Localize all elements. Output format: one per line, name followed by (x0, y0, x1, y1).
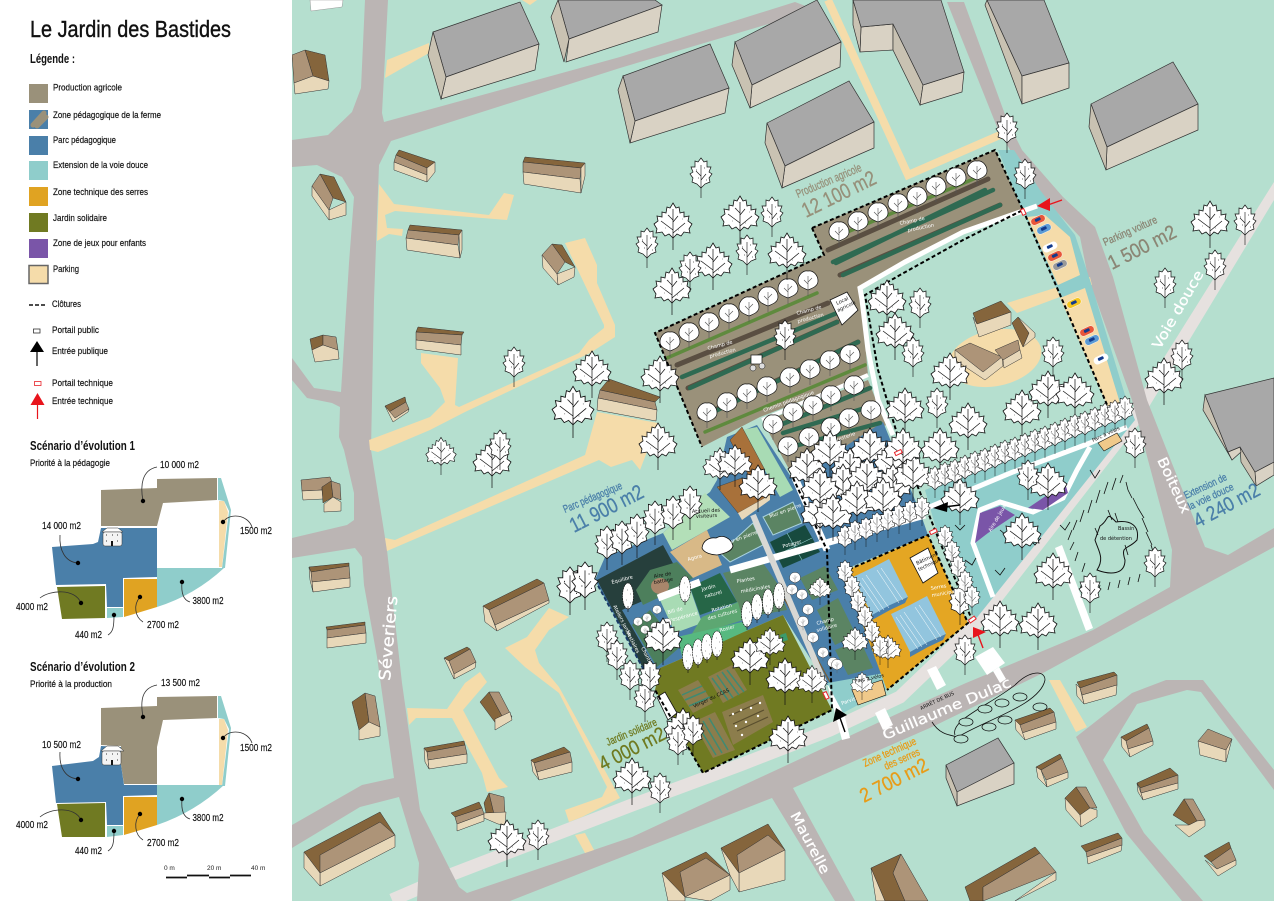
building: grey L block (853, 0, 964, 105)
garden: rotation des cultures (690, 602, 743, 637)
greenhouse 1 (853, 559, 908, 620)
greenhouses (853, 559, 946, 657)
house (1198, 729, 1232, 762)
building: grey block 1 (428, 2, 539, 99)
zone: technique des serres (843, 535, 968, 690)
roads (292, 0, 1274, 901)
legend: zone technique: Zone technique des serres (53, 187, 148, 198)
area: zone technique des serres: Zone technique (861, 736, 918, 770)
legend: parc pédagogique (29, 135, 116, 155)
arrow: red south (973, 627, 986, 648)
street: Séveriers: Séveriers (375, 595, 401, 681)
garden: bill de l'espérance (660, 588, 702, 633)
house: large south 2 (871, 854, 928, 901)
house (424, 741, 467, 769)
legend: portail public: Portail public (52, 325, 99, 336)
garden: mur en pierre 1 (720, 523, 763, 562)
street: Guillaume Dulac: Guillaume Dulac (880, 675, 1014, 744)
building: grey block 8 (1089, 62, 1198, 170)
arrow: red north (1037, 198, 1062, 211)
sheds (657, 292, 938, 720)
chart: scénario 1 map: 10 000 m2 (160, 460, 199, 471)
legend: extension voie douce: Extension de la voie douce (53, 160, 148, 171)
trees: strip hedge (837, 396, 1134, 665)
arrow: black south entrance (833, 708, 847, 732)
road: south-east loop (1076, 680, 1274, 901)
building: grey block 9 (1203, 378, 1274, 486)
house (394, 150, 435, 182)
title: Le Jardin des Bastides (30, 16, 231, 42)
panel: legend sidebar (0, 0, 292, 901)
house (480, 692, 512, 730)
garden annotations: Accueil des (692, 508, 721, 515)
area: jardin solidaire: Jardin solidaire (604, 717, 659, 749)
legend: portail technique: Portail technique (52, 378, 113, 389)
garden annotations: Aire de jeux (988, 504, 1008, 533)
garden annotations: Rosier (719, 624, 736, 634)
chart: scénario 1 map: 440 m2 (75, 630, 102, 641)
area: zone technique des serres: 2 700 m2 (856, 754, 932, 807)
farmhouse (717, 427, 770, 520)
house (1081, 833, 1122, 864)
garden annotations: production (907, 223, 935, 234)
building: grey block 3 (618, 44, 729, 143)
building: grey block 4 (732, 0, 841, 108)
garden annotations: Aire de (653, 571, 672, 580)
chart: scénario 2 map: 440 m2 (75, 846, 102, 857)
garden annotations: Bâtiment (915, 551, 939, 567)
garden: aire de battage (636, 562, 693, 605)
area: extension voie douce: 4 240 m2 (1190, 479, 1264, 532)
legend: entrée publique (30, 341, 108, 366)
legend: entrée publique: Entrée publique (52, 346, 108, 357)
garden annotations: Parvis (841, 696, 857, 707)
garden annotations: Ateliers jardin (611, 604, 632, 638)
chart: scénario 2 map (16, 678, 272, 857)
garden annotations: Mur en pierre (725, 530, 758, 547)
garden annotations: Aire bleu et solidaire (851, 514, 901, 539)
garden annotations: Parc à vélos (1091, 425, 1121, 444)
legend: jardin solidaire (29, 213, 107, 232)
legend: portail public (34, 325, 99, 336)
arrows (833, 198, 1062, 732)
zone: orchard strip (763, 380, 886, 480)
garden: potager médical (770, 525, 820, 568)
garden annotations: médicinales (740, 583, 771, 595)
arrow: black east entrance (933, 502, 960, 512)
house (312, 174, 346, 220)
area: jardin solidaire: 4 000 m2 (595, 723, 669, 775)
house (352, 693, 380, 740)
trees: leafy A (426, 196, 1229, 867)
trees: round orchard rows (660, 161, 987, 462)
garden annotations: Bill de (667, 606, 683, 616)
subheading: scénario 1: Priorité à la pédagogie (30, 458, 110, 469)
legend: zone de jeux (29, 238, 146, 258)
area: extension voie douce: Extension de (1182, 471, 1229, 502)
chart: scénario 2 map: 2700 m2 (147, 838, 179, 849)
house (1065, 787, 1097, 827)
parking and access paths (369, 0, 1092, 853)
parking bus-stop area (932, 673, 1047, 743)
garden annotations: Agroforesterie (821, 431, 856, 449)
legend: zone de jeux: Zone de jeux pour enfants (53, 238, 146, 249)
area: parking voiture: 1 500 m2 (1104, 221, 1180, 274)
crop rows (667, 175, 1000, 450)
chart: scénario 1 map: 2700 m2 (147, 620, 179, 631)
legend: jardin solidaire: Jardin solidaire (53, 213, 107, 224)
scale bar (164, 865, 265, 878)
house (416, 327, 464, 355)
legend: zone pédagogique de la ferme: Zone pédagogique de la ferme (53, 110, 161, 121)
street: Boiteux: Boiteux (1153, 455, 1193, 516)
zone: jardin plots (678, 633, 788, 758)
garden annotations: Verger du CCAS (692, 688, 731, 710)
panel: map background (292, 0, 1274, 901)
garden annotations: Chantier (639, 646, 655, 669)
area: production agricole: 12 100 m2 (798, 167, 880, 222)
house: large south 3 (965, 847, 1056, 901)
garden: plantes médicinales (723, 563, 787, 618)
area: production agricole: Production agricole (794, 160, 864, 201)
zone: jardin solidaire (655, 615, 832, 773)
garden: mini orchard (632, 610, 680, 667)
chart: scénario 1 map: 4000 m2 (16, 602, 48, 613)
chart: scénario 1 map: 3800 m2 (192, 596, 224, 607)
house (1204, 842, 1236, 876)
garden annotations (610, 216, 1134, 712)
bassin de détention (1068, 475, 1155, 595)
garden annotations: Parc à vélos (854, 672, 885, 685)
garden annotations: l'espérance (669, 610, 698, 624)
house (523, 157, 585, 193)
garden annotations: des cultures (707, 608, 738, 622)
house (451, 793, 506, 831)
house (406, 225, 462, 258)
garden annotations: visiteurs (696, 513, 718, 520)
legend: parc pédagogique: Parc pédagogique (53, 135, 116, 146)
heading: scénario 1: Scénario d’évolution 1 (30, 439, 135, 453)
legend: extension voie douce (29, 160, 148, 180)
chart: scénario 1 map (16, 460, 272, 641)
garden annotations: production (709, 347, 736, 360)
garden annotations: ARRÊT DE BUS (918, 689, 955, 712)
street: Maurelle: Maurelle (786, 809, 833, 877)
garden annotations: Champ de (796, 305, 822, 317)
garden annotations: Vestiaires (624, 630, 641, 655)
trees: dense grove (703, 428, 959, 541)
building: grey block 2 (551, 0, 662, 62)
chart: scénario 1 map: 14 000 m2 (42, 521, 81, 532)
area: parc pédagogique: 11 900 m2 (566, 481, 648, 537)
garden: équilibre (597, 545, 675, 672)
road: Séveriers (292, 0, 1274, 901)
garden annotations: Champ (816, 617, 835, 627)
trees: serrated B (489, 113, 1256, 860)
house (444, 647, 476, 679)
house (1036, 754, 1068, 787)
garden annotations: Champ de (899, 216, 925, 227)
garden annotations: Local (835, 296, 850, 307)
house (597, 379, 660, 421)
zone: parc pédagogique (595, 422, 928, 685)
garden annotations: Champ de (707, 340, 733, 352)
garden annotations: Agora (687, 553, 703, 563)
play zone (975, 483, 1068, 543)
scale bar: 0 m (164, 865, 175, 872)
mini bushes on voie douce (955, 470, 1100, 575)
house (310, 335, 339, 362)
garden annotations: agricole (836, 300, 857, 314)
legend: clôtures: Clôtures (52, 299, 81, 310)
scale bar: 40 m (251, 865, 265, 872)
garden annotations: Chemin pédagogique (762, 389, 815, 414)
legend: parking (29, 264, 79, 284)
area: parc pédagogique: Parc pédagogique (561, 480, 624, 516)
voie douce (392, 182, 1274, 900)
house (483, 579, 549, 631)
house: large south (662, 824, 785, 901)
garden annotations: municipales (931, 588, 962, 599)
house: long (304, 812, 395, 886)
garden annotations: Potager (782, 539, 803, 550)
stone path (753, 515, 824, 682)
houses (292, 50, 1236, 901)
garden annotations: naturel (704, 590, 723, 600)
garden annotations: technique (917, 557, 942, 573)
farm complex (955, 301, 1035, 380)
house (1121, 724, 1153, 757)
house (542, 244, 575, 285)
area: zone technique des serres: des serres (882, 746, 922, 773)
grey collective buildings (310, 0, 1274, 806)
garden annotations: Équilibre (610, 573, 634, 586)
garden annotations: Bassin (1118, 526, 1134, 532)
garden annotations: battage (653, 577, 674, 586)
icon: farmhouse (101, 746, 124, 765)
area labels (561, 160, 1264, 807)
chart: scénario 1 map: 1500 m2 (240, 526, 272, 537)
area: parking voiture: Parking voiture (1101, 214, 1159, 249)
building: grey block 7 (985, 0, 1069, 104)
garden annotations: Rotation (711, 603, 733, 614)
garden: rosier (677, 622, 748, 660)
zone: parking voiture (1027, 215, 1120, 407)
building: grey block 5 (765, 81, 874, 188)
chart: scénario 2 map: 3800 m2 (192, 813, 224, 824)
house (301, 477, 341, 512)
legend: parking: Parking (53, 264, 79, 275)
building: grey block south (946, 738, 1014, 806)
portails (823, 208, 1026, 699)
subheading: scénario 2: Priorité à la production (30, 679, 112, 690)
garden: accueil (663, 493, 730, 550)
garden annotations: production (797, 312, 824, 325)
legend: production agricole (29, 82, 122, 103)
zone: pedagogical gardens (597, 427, 873, 682)
house (1076, 672, 1117, 704)
house (1137, 768, 1178, 800)
building: white shed top (310, 0, 343, 11)
trees (426, 113, 1256, 867)
bush: agora (702, 536, 733, 555)
chart: scénario 2 map: 1500 m2 (240, 743, 272, 754)
house (1015, 708, 1056, 740)
white internal paths (658, 206, 1127, 598)
white access stubs (827, 545, 1093, 740)
garden annotations: Jardin (700, 583, 716, 593)
trees: poplars (622, 576, 784, 673)
garden annotations: Plantes (736, 576, 756, 585)
garden annotations: médical (786, 545, 807, 557)
cars (1030, 214, 1109, 365)
zone: extension voie douce (827, 150, 1135, 713)
street labels (375, 268, 1207, 877)
area: extension voie douce: la voie douce (1186, 481, 1236, 513)
garden annotations: Mur en pierre (769, 503, 802, 520)
legend: entrée technique (30, 393, 113, 419)
legend: entrée technique: Entrée technique (52, 396, 113, 407)
garden: jardin naturel (690, 573, 737, 615)
garden: chemin plots (800, 566, 873, 675)
trees: small orchard (634, 572, 842, 673)
house (326, 622, 366, 648)
legend: production agricole: Production agricole (53, 82, 122, 94)
legend: clôtures (29, 299, 81, 310)
scale bar: 20 m (207, 865, 221, 872)
chart: scénario 2 map: 4000 m2 (16, 820, 48, 831)
icon: farmhouse (102, 528, 123, 546)
house (385, 397, 409, 422)
house (292, 50, 329, 94)
heading: scénario 2: Scénario d’évolution 2 (30, 660, 135, 674)
garden annotations: Serres (930, 583, 947, 592)
bike racks (852, 433, 1122, 705)
garden: agora (670, 530, 722, 578)
garden annotations: de détention (1100, 535, 1132, 542)
zone: production agricole (655, 150, 1023, 447)
heading: légende: Légende : (30, 52, 75, 66)
fences (595, 150, 1108, 773)
chart: scénario 2 map: 10 500 m2 (42, 740, 81, 751)
house (531, 747, 572, 780)
garden: circle of battage (651, 578, 669, 594)
house (1173, 799, 1205, 837)
house (309, 563, 350, 592)
garden: light corridor (742, 427, 793, 497)
tractor (750, 355, 765, 371)
chart: scénario 2 map: 13 500 m2 (161, 678, 200, 689)
legend: portail technique (34, 378, 113, 389)
legend: zone technique (29, 187, 148, 206)
vertical tree line path (784, 598, 830, 682)
legend: zone pédagogique de la ferme (29, 110, 161, 129)
street: Voie douce: Voie douce (1150, 268, 1207, 352)
garden annotations: solidaire (816, 623, 838, 634)
garden: mur en pierre 2 (763, 502, 802, 535)
greenhouse 2 (891, 596, 946, 657)
